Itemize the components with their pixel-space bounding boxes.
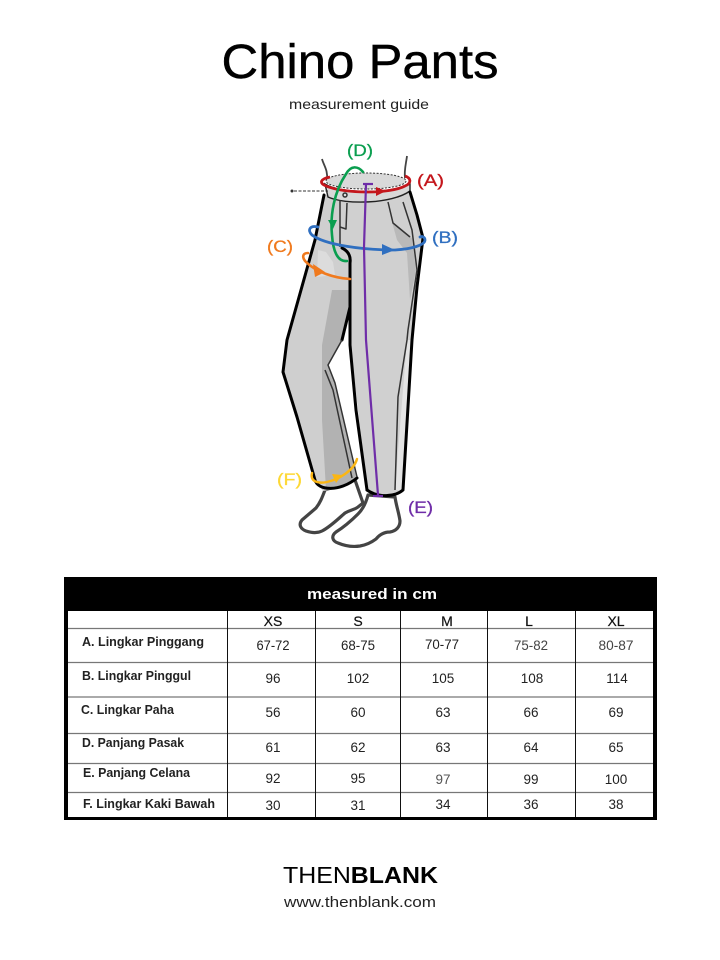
table frame bbox=[64, 577, 657, 820]
row C: 60 bbox=[350, 705, 366, 720]
row E bbox=[83, 766, 627, 787]
pants: far leg bbox=[283, 195, 357, 491]
table body bbox=[68, 611, 653, 817]
row C: 56 bbox=[265, 705, 281, 720]
row F: 38 bbox=[608, 797, 624, 812]
row F: 31 bbox=[350, 798, 366, 813]
row E: 99 bbox=[523, 772, 539, 787]
row A: 75-82 bbox=[514, 638, 548, 653]
row B: 114 bbox=[606, 671, 628, 686]
row A: 80-87 bbox=[598, 638, 634, 653]
row F: 36 bbox=[523, 797, 539, 812]
label A: (A) bbox=[417, 171, 444, 190]
row C: 63 bbox=[435, 705, 451, 720]
pants: hip shading bbox=[392, 222, 416, 300]
label B: (B) bbox=[432, 228, 458, 247]
row D: 65 bbox=[608, 740, 624, 755]
pants: near leg edge highlight bbox=[395, 340, 412, 490]
marker D: rise bbox=[328, 167, 363, 261]
marker A: waist bbox=[321, 176, 410, 196]
row D: 62 bbox=[350, 740, 366, 755]
row E: 97 bbox=[435, 772, 451, 787]
table header: measured in cm: measured in cm bbox=[307, 586, 437, 603]
website url: www.thenblank.com bbox=[283, 894, 436, 911]
brand logo: THENBLANK: THENBLANK bbox=[283, 862, 438, 888]
row C: C. Lingkar Paha bbox=[81, 703, 175, 717]
row D: D. Panjang Pasak bbox=[82, 736, 184, 750]
row B: 108 bbox=[521, 671, 543, 686]
shoes bbox=[300, 480, 400, 546]
row C: 66 bbox=[523, 705, 539, 720]
row A: 70-77 bbox=[425, 637, 459, 652]
pants: inner waist bbox=[326, 173, 406, 189]
row A bbox=[82, 635, 634, 653]
marker B: hip bbox=[310, 227, 425, 255]
row F bbox=[83, 797, 624, 813]
pants: outlines bbox=[283, 192, 423, 496]
row B bbox=[82, 669, 628, 686]
column headers: sizes: XS bbox=[264, 613, 282, 629]
row B: B. Lingkar Pinggul bbox=[82, 669, 191, 683]
pants: thigh highlight bbox=[317, 250, 335, 277]
row C: 69 bbox=[608, 705, 624, 720]
subtitle: measurement guide bbox=[289, 96, 429, 112]
marker: dotted waist pointer bbox=[290, 190, 328, 192]
row B: 105 bbox=[432, 671, 454, 686]
body: torso lines bbox=[322, 156, 407, 180]
row C bbox=[81, 703, 624, 720]
marker E: length bbox=[363, 184, 383, 496]
pants: far leg shading bbox=[322, 290, 356, 490]
row E: E. Panjang Celana bbox=[83, 766, 191, 780]
row B: 102 bbox=[347, 671, 369, 686]
label F: (F) bbox=[277, 470, 302, 489]
row E: 92 bbox=[265, 771, 281, 786]
column headers: sizes: S bbox=[353, 613, 363, 629]
column headers: sizes: XL bbox=[607, 613, 625, 629]
pants: near leg and hip bbox=[335, 190, 423, 497]
illustration: chino pants with measurement markers bbox=[267, 141, 458, 546]
label C: (C) bbox=[267, 237, 293, 256]
pants: seams and pockets bbox=[325, 193, 417, 490]
row B: 96 bbox=[265, 671, 281, 686]
column headers: sizes: M bbox=[441, 613, 453, 629]
row A: A. Lingkar Pinggang bbox=[82, 635, 204, 649]
label D: (D) bbox=[347, 141, 373, 160]
row D: 63 bbox=[435, 740, 451, 755]
marker F: leg opening bbox=[312, 459, 357, 483]
size table bbox=[64, 577, 657, 820]
row E: 100 bbox=[605, 772, 627, 787]
title: Chino Pants bbox=[222, 36, 499, 89]
row A: 68-75 bbox=[341, 638, 375, 653]
row F: 34 bbox=[435, 797, 451, 812]
pants: waistband bbox=[325, 184, 410, 202]
label E: (E) bbox=[408, 498, 433, 517]
row F: F. Lingkar Kaki Bawah bbox=[83, 797, 215, 811]
column headers: sizes: L bbox=[525, 613, 533, 629]
row E: 95 bbox=[350, 771, 366, 786]
row F: 30 bbox=[265, 798, 281, 813]
row D: 61 bbox=[265, 740, 281, 755]
row D bbox=[82, 736, 624, 755]
column headers: sizes bbox=[264, 613, 625, 629]
row A: 67-72 bbox=[256, 638, 290, 653]
row D: 64 bbox=[523, 740, 539, 755]
marker C: thigh bbox=[303, 253, 350, 279]
